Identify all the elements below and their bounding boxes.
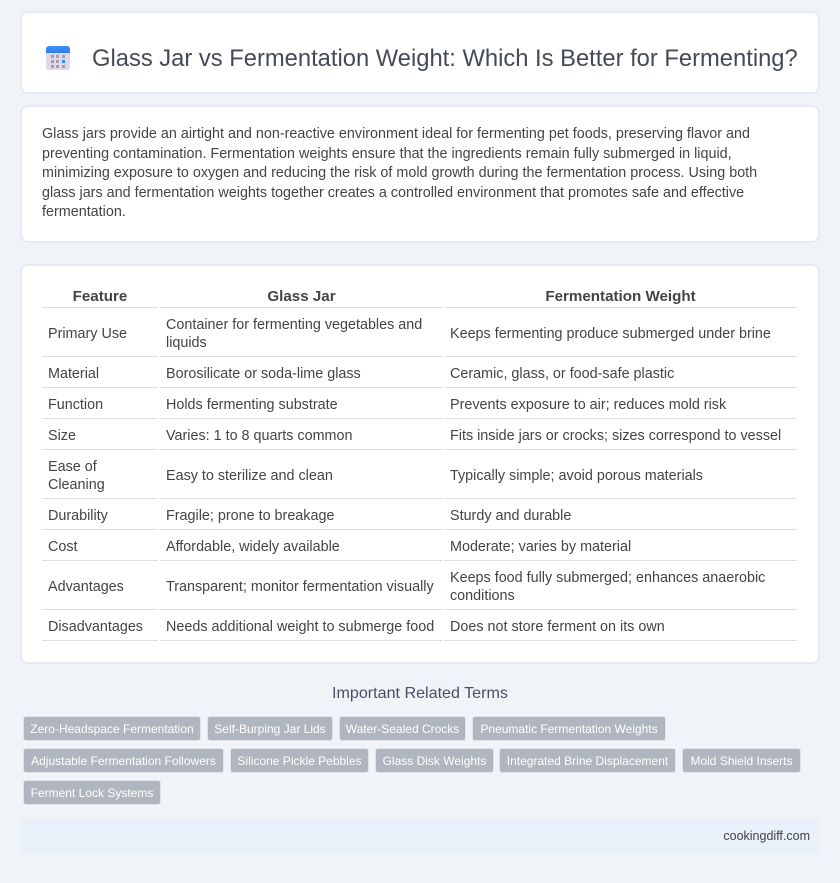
panel: comparison table [20, 264, 820, 664]
Primary Use: Fermentation Weight: Keeps fermenting produce submerged under brine [450, 326, 771, 342]
Advantages: Glass Jar: Transparent; monitor fermentation visually [166, 579, 434, 595]
Function: Fermentation Weight: Prevents exposure to air; reduces mold risk [450, 397, 726, 413]
header: Fermentation Weight: Fermentation Weight [545, 288, 696, 305]
tag [682, 748, 801, 773]
intro paragraph: minimizing exposure to oxygen and reducing the risk of mold growth during the fermentation process. Using both [42, 165, 757, 181]
row: Material: Material [48, 366, 99, 382]
Advantages: Fermentation Weight: Keeps food fully submerged; enhances anaerobic [450, 570, 765, 586]
row: Ease of Cleaning: Ease of [48, 459, 97, 475]
tag: Ferment Lock Systems [31, 786, 153, 800]
related terms tags [23, 716, 801, 805]
tag [472, 716, 666, 741]
row: Size: Size [48, 428, 76, 444]
tag: Mold Shield Inserts [690, 754, 793, 768]
Advantages: Fermentation Weight: conditions [450, 588, 515, 604]
row: Disadvantages: Disadvantages [48, 619, 143, 635]
Ease of Cleaning: Glass Jar: Easy to sterilize and clean [166, 468, 333, 484]
header: Feature: Feature [73, 288, 127, 305]
intro paragraph: Glass jars provide an airtight and non-reactive environment ideal for fermenting pet foods, preserving flavor and [42, 126, 750, 142]
tag: Water-Sealed Crocks [346, 722, 459, 736]
header: Glass Jar: Glass Jar [267, 288, 336, 305]
Primary Use: Glass Jar: Container for fermenting vegetables and [166, 317, 422, 333]
Function: Glass Jar: Holds fermenting substrate [166, 397, 338, 413]
tag [23, 780, 161, 805]
tag: Self-Burping Jar Lids [214, 722, 326, 736]
Primary Use: Glass Jar: liquids [166, 335, 207, 351]
Cost: Glass Jar: Affordable, widely available [166, 539, 340, 555]
Primary Use: Glass Jar [166, 317, 422, 351]
Size: Glass Jar: Varies: 1 to 8 quarts common [166, 428, 352, 444]
row: Cost: Cost [48, 539, 78, 555]
title: Glass Jar vs Fermentation Weight: Which Is Better for Fermenting? [92, 45, 798, 72]
intro paragraph [42, 126, 757, 220]
icon: calendar jar [46, 46, 70, 70]
Durability: Fermentation Weight: Sturdy and durable [450, 508, 571, 524]
row: Durability: Durability [48, 508, 108, 524]
panel: introduction [20, 105, 820, 243]
row: Function: Function [48, 397, 103, 413]
panel: title header [20, 11, 820, 94]
comparison table [42, 288, 797, 641]
intro paragraph: fermentation. [42, 204, 126, 220]
tag: Adjustable Fermentation Followers [31, 754, 216, 768]
Cost: Fermentation Weight: Moderate; varies by material [450, 539, 631, 555]
tag [339, 716, 466, 741]
tag [207, 716, 333, 741]
Material: Glass Jar: Borosilicate or soda-lime glass [166, 366, 361, 382]
row: Advantages: Advantages [48, 579, 124, 595]
tag [499, 748, 676, 773]
Advantages: Fermentation Weight [450, 570, 765, 604]
footer bar [20, 819, 820, 853]
heading: related terms: Important Related Terms [332, 684, 508, 702]
Disadvantages: Glass Jar: Needs additional weight to submerge food [166, 619, 434, 635]
tag: Glass Disk Weights [383, 754, 486, 768]
Material: Fermentation Weight: Ceramic, glass, or food-safe plastic [450, 366, 674, 382]
Ease of Cleaning: Fermentation Weight: Typically simple; avoid porous materials [450, 468, 703, 484]
tag [23, 748, 224, 773]
Size: Fermentation Weight: Fits inside jars or crocks; sizes correspond to vessel [450, 428, 781, 444]
row: Ease of Cleaning: Cleaning [48, 477, 105, 493]
Durability: Glass Jar: Fragile; prone to breakage [166, 508, 334, 524]
tag: Silicone Pickle Pebbles [237, 754, 362, 768]
row: Primary Use: Primary Use [48, 326, 127, 342]
tag [230, 748, 369, 773]
tag: Zero-Headspace Fermentation [30, 722, 194, 736]
Disadvantages: Fermentation Weight: Does not store ferment on its own [450, 619, 665, 635]
tag: Pneumatic Fermentation Weights [480, 722, 658, 736]
tag: Integrated Brine Displacement [507, 754, 668, 768]
tag [375, 748, 494, 773]
intro paragraph: preventing contamination. Fermentation weights ensure that the ingredients remain fully submerged in liquid, [42, 146, 732, 162]
tag [23, 716, 201, 741]
intro paragraph: glass jars and fermentation weights together creates a controlled environment that promotes safe and effective [42, 184, 744, 200]
row: Ease of Cleaning [48, 459, 105, 493]
footer source text: cookingdiff.com [723, 829, 810, 843]
